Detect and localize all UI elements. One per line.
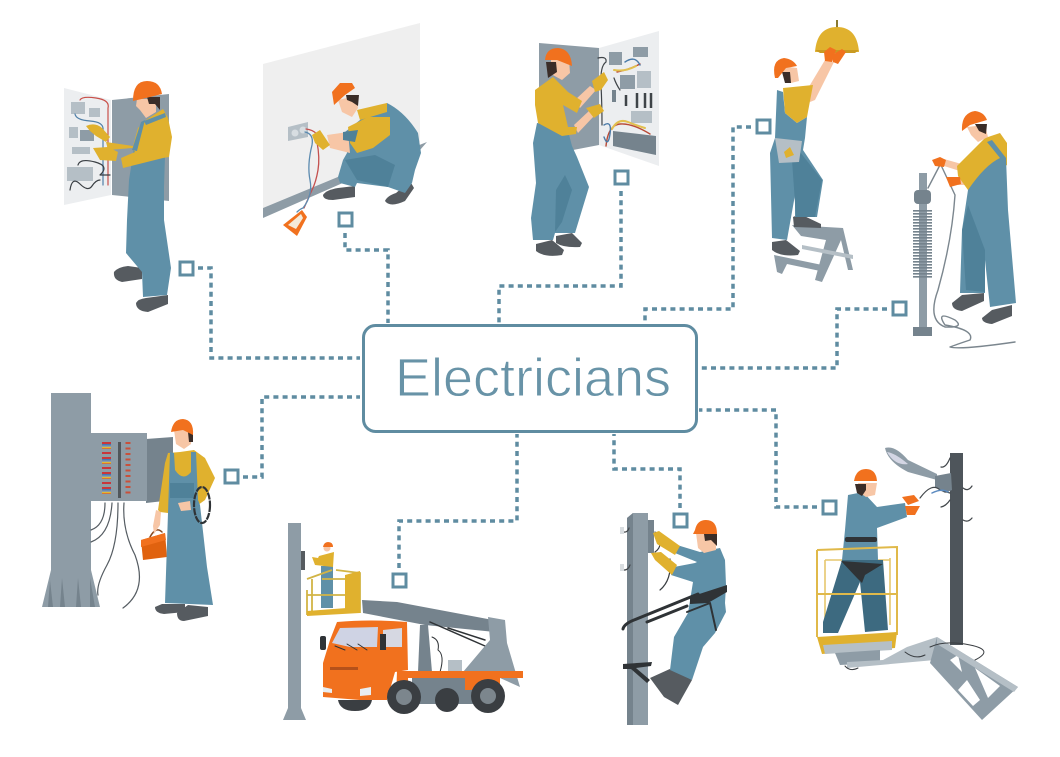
overalls [770, 90, 823, 240]
glove [312, 130, 330, 150]
panel: electrician in lift basket at street lamp [817, 448, 1018, 720]
overalls [165, 452, 213, 605]
utility pole [950, 453, 963, 645]
toolbox [141, 530, 167, 560]
pole [283, 523, 306, 720]
mirror [320, 636, 326, 650]
head [696, 533, 716, 553]
shirt [957, 133, 1007, 190]
overalls [960, 140, 1016, 307]
connectors [198, 127, 887, 568]
panel: electrician at switchboard, top centre [531, 31, 659, 256]
connector 4 [645, 127, 751, 324]
head [782, 66, 799, 83]
overalls [531, 123, 589, 240]
overalls [126, 114, 171, 297]
forearm [327, 132, 350, 153]
shoes [114, 266, 142, 282]
gloves [86, 124, 110, 142]
head [174, 430, 192, 449]
helmet [962, 111, 987, 131]
arms [575, 86, 596, 108]
overalls [338, 103, 421, 193]
shoes [155, 604, 185, 614]
stool [774, 225, 853, 282]
grille [330, 667, 358, 670]
head [136, 99, 156, 118]
arms [807, 60, 834, 102]
head [551, 60, 570, 80]
hydraulic hoses [845, 643, 984, 670]
connector 5 [699, 309, 887, 368]
pole box [301, 551, 305, 570]
hooks [941, 458, 972, 521]
cabinet components [67, 97, 110, 190]
street lamp [885, 448, 952, 498]
fuses [106, 442, 128, 498]
small worker [312, 542, 334, 608]
body [670, 545, 726, 680]
truck bed [396, 671, 523, 700]
multimeter [283, 210, 307, 236]
lift truss [930, 637, 1018, 720]
shoes [323, 186, 355, 200]
connector 3 [499, 191, 621, 323]
connector 7 [399, 434, 517, 568]
cabinet door [112, 94, 169, 201]
helmet [171, 419, 193, 435]
forearms [944, 159, 965, 172]
gloves [824, 47, 836, 62]
socket [288, 122, 308, 141]
insulator [913, 173, 932, 336]
shirt [783, 85, 813, 123]
head [858, 483, 877, 497]
connector 8 [614, 434, 680, 508]
baseboard [263, 142, 427, 218]
shirt [158, 450, 215, 513]
insulators [622, 528, 630, 570]
shirt [106, 109, 172, 168]
lift base [823, 637, 937, 668]
gloves [902, 495, 919, 505]
climbing belt [623, 585, 727, 630]
panel: electrician at open cabinet, left [64, 81, 172, 312]
cab [323, 620, 408, 700]
column [42, 393, 100, 607]
tool pouch [775, 138, 802, 163]
wheels [338, 679, 505, 714]
cabinet panel [599, 31, 659, 166]
hand [153, 510, 161, 534]
cable set [91, 503, 139, 608]
shirt sleeve [348, 117, 390, 153]
shirt collar [357, 103, 387, 120]
wire coil [194, 487, 210, 523]
helmet [545, 48, 572, 66]
jacket [842, 492, 907, 560]
panel: electrician with toolbox at power cabinet [42, 393, 215, 621]
shoes [952, 293, 984, 311]
basket floor [817, 632, 897, 654]
basket front [817, 547, 897, 637]
basket back [825, 558, 890, 625]
central title box [364, 326, 696, 432]
boom [362, 600, 520, 687]
wires [655, 532, 670, 590]
node squares [180, 120, 906, 587]
title: Electricians [395, 348, 671, 408]
wall [263, 23, 420, 208]
trousers [823, 560, 888, 633]
helmet [774, 58, 797, 78]
shoes [772, 240, 800, 255]
panel: electrician fitting lamp on stool [770, 20, 859, 282]
helmet [693, 520, 717, 534]
helmet [332, 83, 355, 105]
boot and gaff [623, 662, 692, 705]
bib [343, 130, 358, 142]
head [338, 96, 358, 117]
pole [627, 513, 648, 725]
cabinet door [539, 43, 599, 150]
ceiling lamp [815, 20, 859, 53]
gloves [653, 531, 680, 555]
gloves [592, 72, 608, 92]
power box [91, 433, 147, 501]
hand on belly [178, 501, 191, 511]
cabinet parts [598, 47, 656, 155]
shirt [535, 77, 582, 136]
connector 2 [345, 233, 388, 323]
cabinet panel [64, 88, 111, 205]
helmet [854, 469, 877, 481]
panel: electrician with insulator and cable [913, 111, 1016, 348]
connector 9 [699, 410, 817, 507]
panel: electrician testing wall socket [263, 23, 427, 236]
cable [928, 163, 1015, 348]
door [146, 437, 173, 503]
gloves [932, 157, 946, 167]
test leads [304, 129, 319, 208]
head [967, 125, 988, 142]
windows [332, 627, 378, 647]
panel: bucket truck and pole [283, 523, 523, 720]
bucket [307, 570, 360, 616]
helmet [133, 81, 162, 101]
panel: electrician climbing pole [620, 513, 727, 725]
connector 1 [198, 268, 360, 358]
chassis [412, 677, 478, 704]
harness [841, 537, 883, 583]
connector 6 [243, 397, 360, 477]
shoes [536, 240, 564, 256]
